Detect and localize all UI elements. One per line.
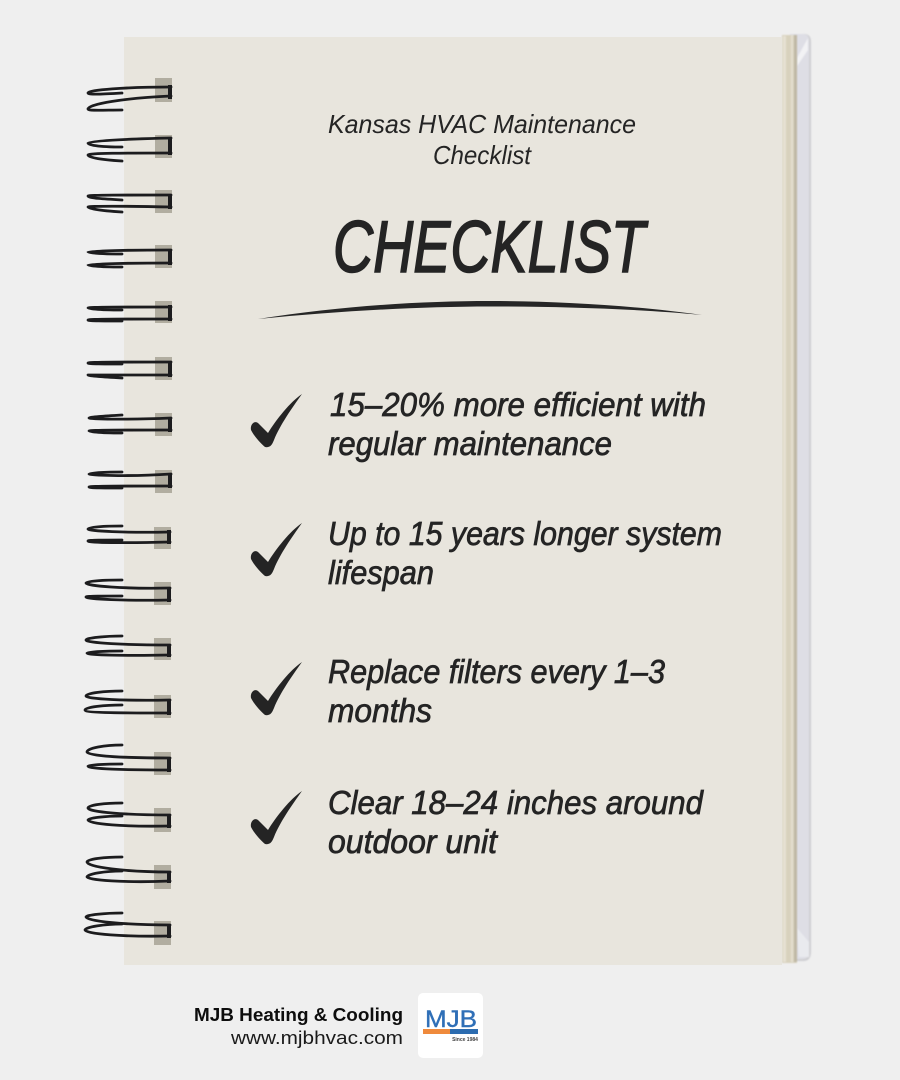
item text [328, 386, 706, 462]
footer company name: www.mjbhvac.com [230, 1028, 403, 1048]
icon: check mark [251, 523, 302, 576]
subtitle: Kansas HVAC Maintenance [328, 109, 636, 139]
icon: check mark [251, 791, 302, 844]
item text: outdoor unit [328, 823, 499, 860]
icon: check mark [251, 662, 302, 715]
heading: CHECKLIST: CHECKLIST [333, 207, 648, 288]
icon: check mark [251, 394, 302, 447]
item text: months [328, 692, 432, 729]
wire rings [85, 87, 171, 936]
hole wire clips [167, 85, 172, 938]
item text: lifespan [328, 554, 434, 591]
checklist item 3 [251, 653, 666, 729]
page edges [782, 35, 797, 963]
item text [328, 784, 705, 860]
footer company name: MJB Heating & Cooling [194, 1005, 403, 1025]
notebook [124, 34, 811, 965]
subtitle: Checklist [433, 140, 533, 170]
checklist item 1 [251, 386, 706, 462]
item text [328, 653, 666, 729]
logo [418, 993, 483, 1058]
item text: 15–20% more efficient with [330, 386, 706, 423]
binding holes [154, 78, 172, 945]
item text: regular maintenance [328, 425, 612, 462]
subtitle [328, 109, 636, 170]
checklist item 2 [251, 515, 722, 591]
logo: MJB [425, 1006, 477, 1033]
checklist item 4 [251, 784, 705, 860]
logo: Since 1984 [452, 1037, 478, 1043]
item text [328, 515, 722, 591]
item text: Clear 18–24 inches around [328, 784, 705, 821]
item text: Replace filters every 1–3 [328, 653, 666, 690]
underline swoosh [258, 301, 702, 319]
footer company name [194, 1005, 403, 1048]
back cover [790, 34, 811, 961]
paper page [124, 37, 782, 965]
spiral binding [85, 78, 172, 945]
item text: Up to 15 years longer system [328, 515, 722, 552]
